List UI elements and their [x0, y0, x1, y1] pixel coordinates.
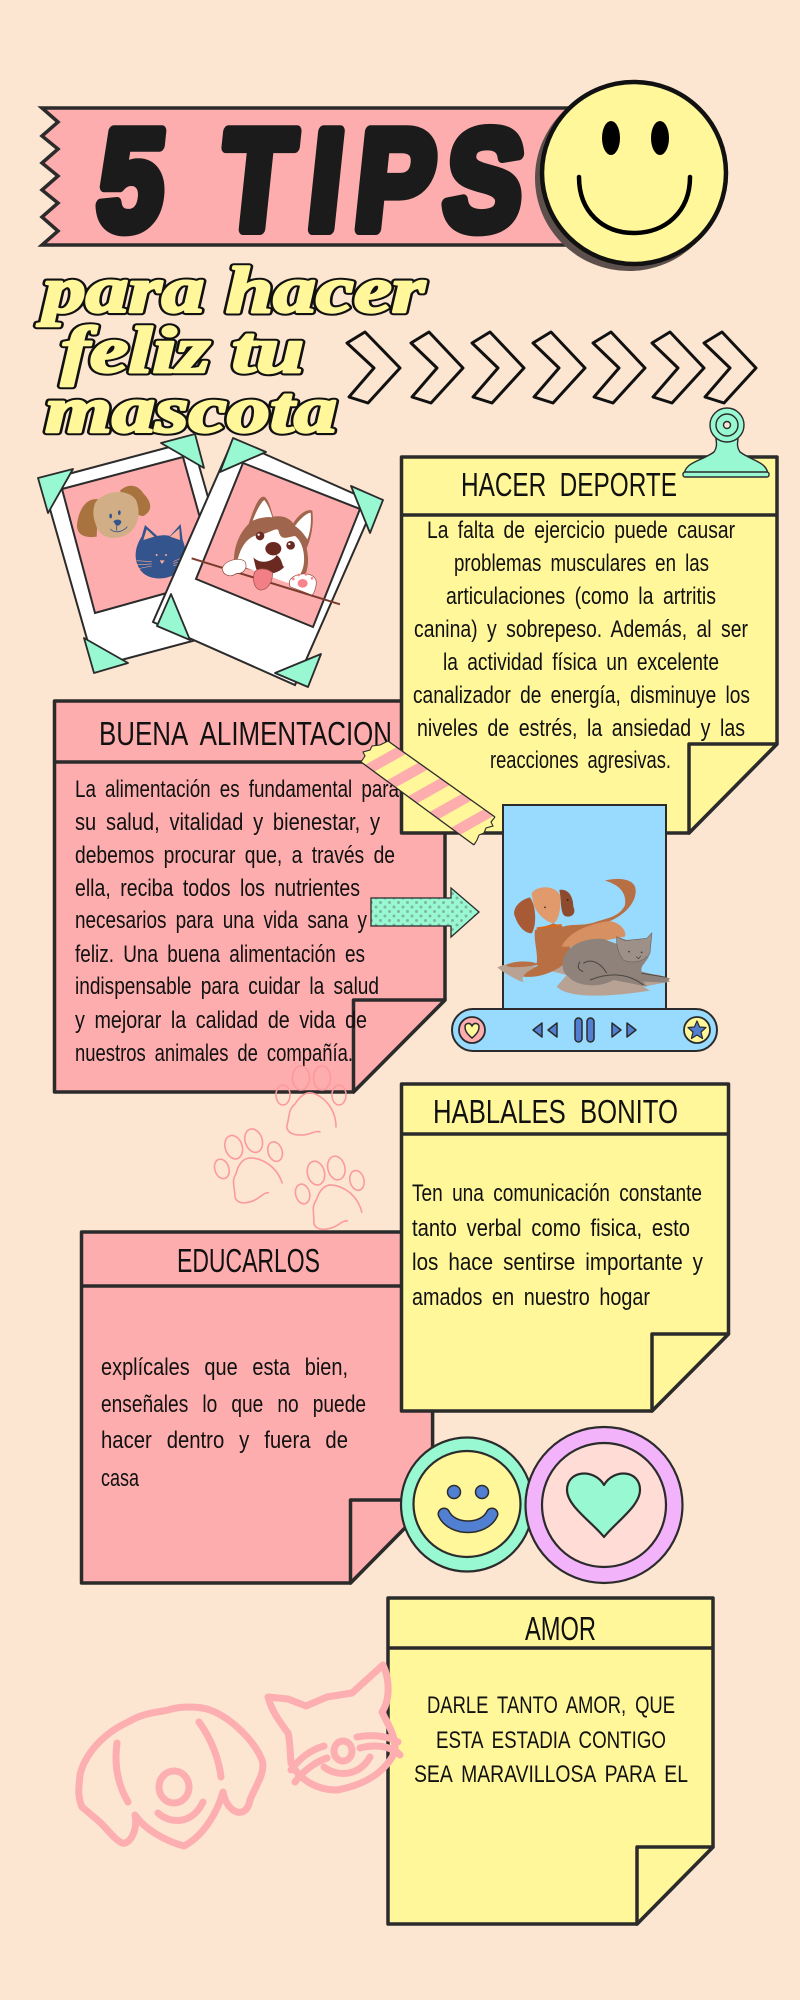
subtitle: para hacer feliz tu mascota: para hacer — [37, 254, 427, 327]
text block: ella, reciba todos los nutrientes — [75, 875, 360, 902]
text block: los hace sentirse importante y — [412, 1249, 703, 1276]
polaroid: husky — [153, 440, 375, 685]
icon: playback controls — [533, 1018, 636, 1042]
text block — [412, 1180, 703, 1311]
text block: ESTA ESTADIA CONTIGO — [436, 1727, 666, 1754]
panel: amor — [388, 1598, 713, 1924]
text block: Ten una comunicación constante — [412, 1180, 702, 1207]
text block: nuestros animales de compañía. — [75, 1040, 353, 1067]
text block: enseñales lo que no puede — [101, 1391, 366, 1418]
heading: BUENA ALIMENTACION — [99, 715, 392, 752]
text block: hacer dentro y fuera de — [101, 1427, 348, 1454]
subtitle: para hacer feliz tu mascota: feliz tu — [61, 314, 304, 387]
text block — [101, 1354, 366, 1492]
icon: dog face — [77, 486, 150, 538]
subtitle: para hacer feliz tu mascota: mascota — [45, 374, 337, 447]
text block: explícales que esta bien, — [101, 1354, 348, 1381]
icon: heart button — [459, 1017, 485, 1043]
media player bar — [452, 1009, 717, 1051]
text block: tanto verbal como fisica, esto — [412, 1215, 690, 1242]
subtitle: para hacer feliz tu mascota — [37, 254, 427, 447]
icon: heart sticker — [526, 1427, 682, 1583]
icon: smiley sticker — [401, 1438, 533, 1572]
heading: AMOR — [525, 1610, 596, 1647]
subtitle: para hacer feliz tu mascota: mascota — [45, 374, 337, 447]
panel: educarlos — [82, 1232, 433, 1583]
text block: su salud, vitalidad y bienestar, y — [75, 809, 380, 836]
icon: pink dog outline — [79, 1707, 263, 1846]
heading: HABLALES BONITO — [433, 1093, 678, 1130]
text block: casa — [101, 1465, 139, 1492]
subtitle: para hacer feliz tu mascota: para hacer — [37, 254, 427, 327]
title text: 5 TIPS — [91, 100, 532, 260]
text block — [414, 1692, 688, 1788]
text block: la actividad física un excelente — [443, 649, 719, 676]
panel: buena alimentacion — [54, 701, 445, 1092]
text block: indispensable para cuidar la salud — [75, 973, 379, 1000]
icon: mint photo corners — [38, 434, 383, 687]
text block: articulaciones (como la artritis — [446, 583, 716, 610]
icon: cat face — [132, 524, 195, 578]
text block: problemas musculares en las — [454, 550, 709, 577]
text block: reacciones agresivas. — [490, 747, 671, 774]
heading: EDUCARLOS — [177, 1242, 320, 1279]
panel: hablales bonito — [402, 1084, 728, 1411]
arrow — [371, 888, 479, 937]
icon: row of chevrons — [347, 332, 756, 403]
text block: amados en nuestro hogar — [412, 1284, 650, 1311]
text block: La falta de ejercicio puede causar — [427, 517, 735, 544]
text block: DARLE TANTO AMOR, QUE — [427, 1692, 675, 1719]
icon: paw prints — [206, 1066, 373, 1235]
text block: y mejorar la calidad de vida de — [75, 1007, 367, 1034]
illustration: dog and cat — [497, 879, 671, 996]
text block: SEA MARAVILLOSA PARA EL — [414, 1761, 688, 1788]
text block — [75, 776, 400, 1067]
subtitle: para hacer feliz tu mascota: feliz tu — [61, 314, 304, 387]
icon: husky dog — [192, 497, 340, 604]
text block: necesarios para una vida sana y — [75, 907, 367, 934]
text block: feliz. Una buena alimentación es — [75, 941, 365, 968]
heading: HACER DEPORTE — [461, 466, 677, 503]
photo panel: dog and cat — [497, 805, 671, 1010]
text block: debemos procurar que, a través de — [75, 842, 395, 869]
polaroid: dog and cat — [42, 441, 245, 667]
icon: smiley face — [535, 82, 726, 271]
text block — [413, 517, 750, 774]
icon: pink cat outline — [268, 1665, 400, 1790]
icon: star button — [684, 1017, 710, 1043]
icon: mint binder clip — [683, 408, 769, 477]
washi tape — [362, 740, 496, 846]
text block: La alimentación es fundamental para — [75, 776, 400, 803]
title banner: 5 TIPS — [42, 100, 575, 260]
panel: hacer deporte — [402, 457, 777, 833]
